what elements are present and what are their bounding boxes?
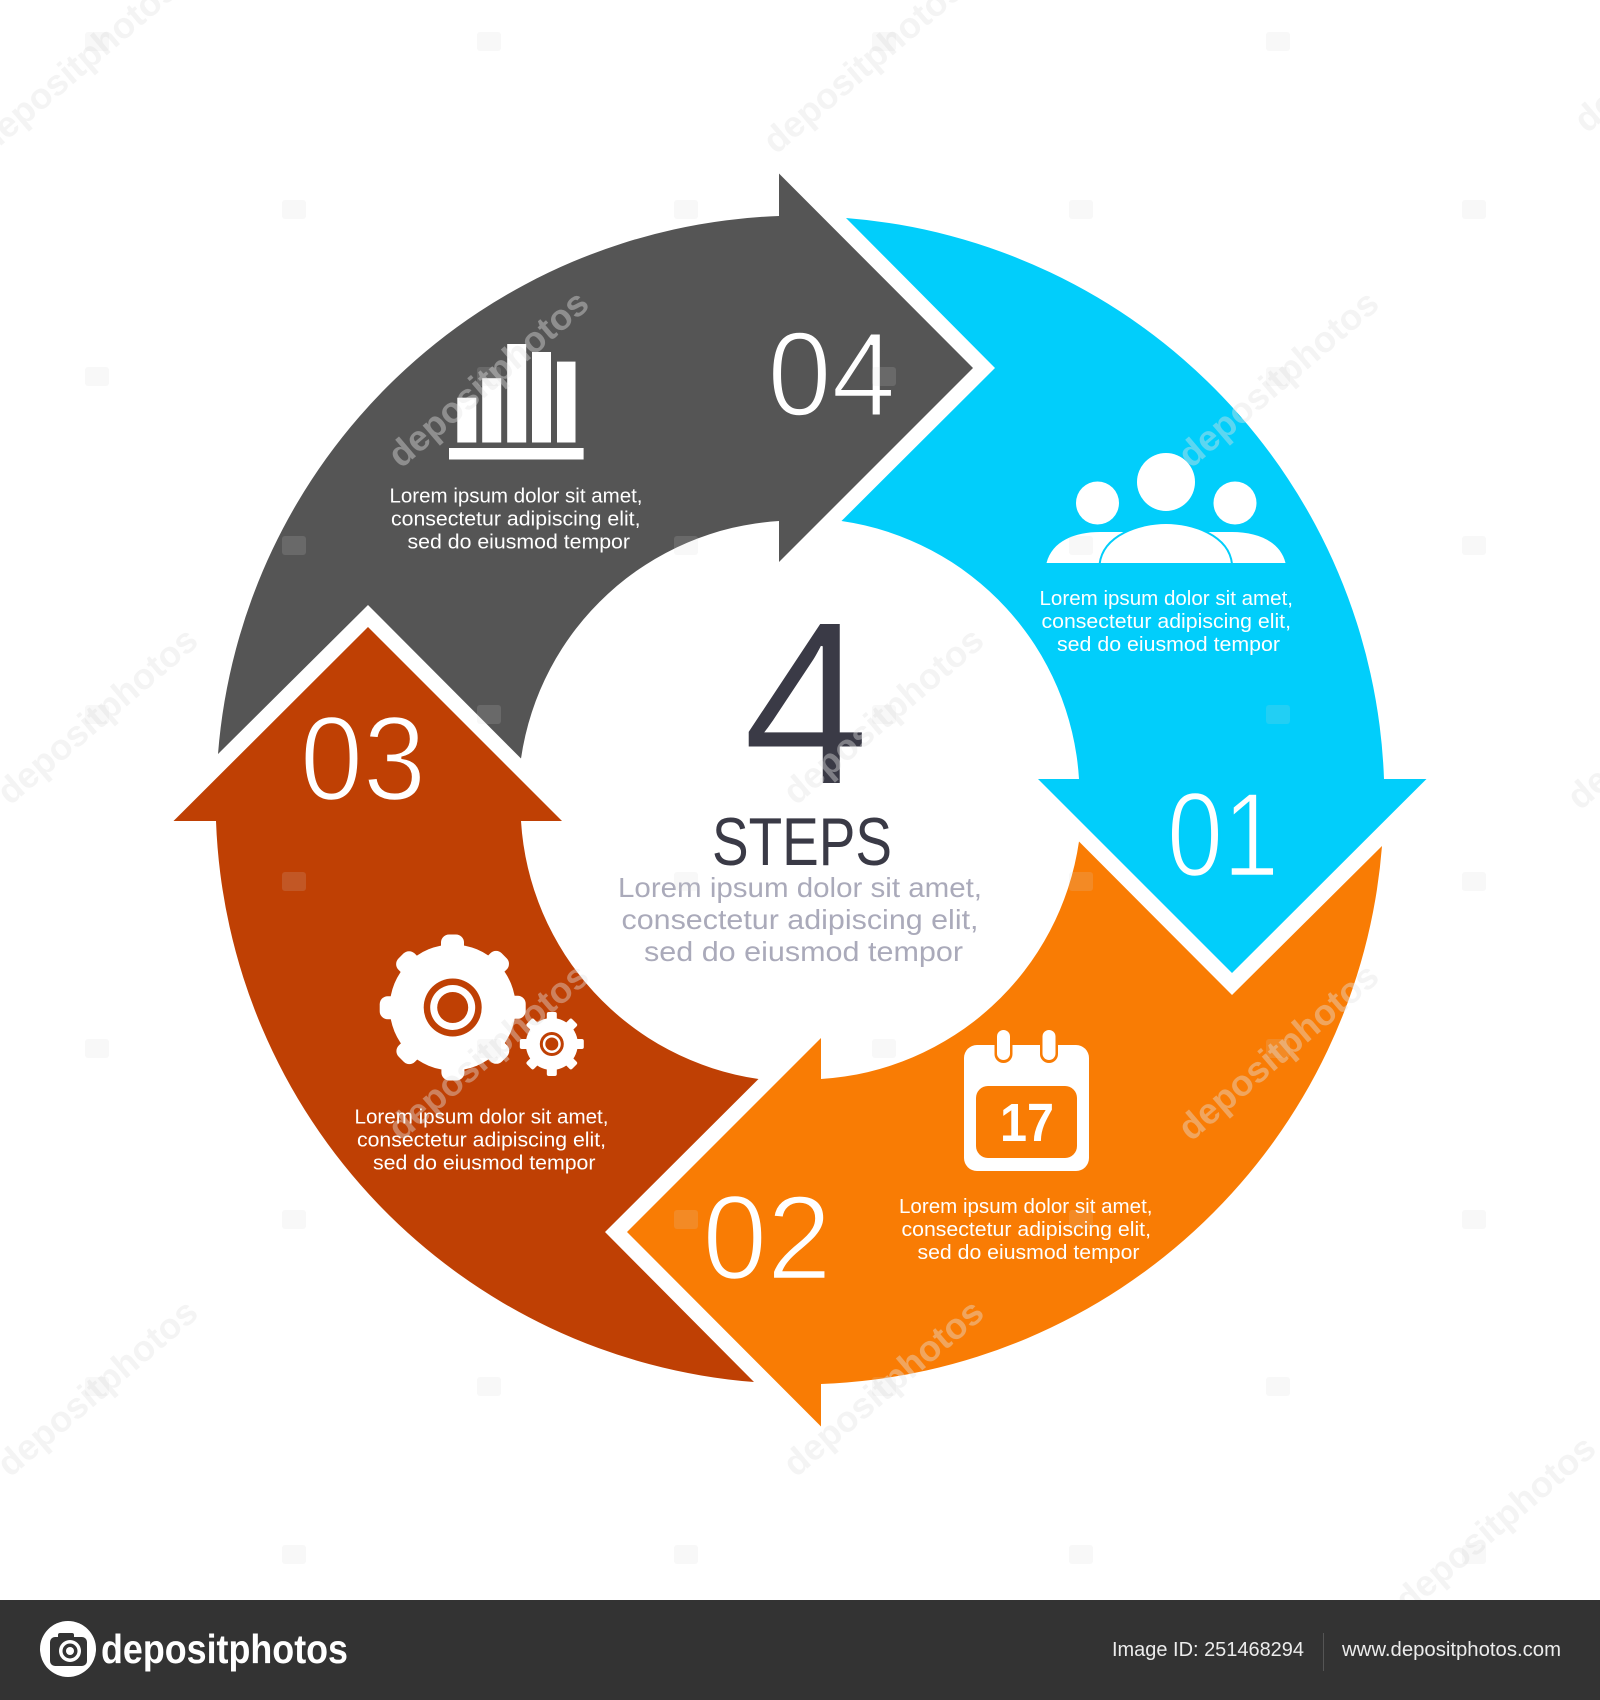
number: 04: 04 [768,308,896,442]
arrow: rust segment [174,627,758,1382]
watermark: depositphotos overlay: depositphotos [775,619,991,812]
panel: step 04 [218,174,973,758]
icon: calendar: 17 [1000,1093,1054,1153]
big numeral 4: 4 [742,572,870,834]
panel: step 02 [627,842,1382,1426]
text: center description: Lorem ipsum dolor sit amet, [618,872,982,903]
heading: STEPS: STEPS [712,804,892,880]
text: step 03 description: Lorem ipsum dolor sit amet, [354,1106,608,1128]
watermark: depositphotos overlay: depositphotos [1170,955,1386,1148]
arrow: gray segment [218,174,973,758]
number: 02: 02 [702,1171,832,1305]
text: step 03 description: consectetur adipiscing elit, [357,1130,606,1152]
text: step 04 description: Lorem ipsum dolor sit amet, [390,486,642,508]
footer bar [0,1600,1600,1700]
watermark: depositphotos overlay: depositphotos [1170,282,1386,475]
panel: step 03 [174,627,758,1382]
image id: Image ID: 251468294 [1112,1639,1304,1661]
number: 03: 03 [300,692,426,826]
text: step 02 description: Lorem ipsum dolor sit amet, [899,1196,1152,1218]
watermark: depositphotos overlay: depositphotos [1387,1427,1600,1620]
watermark: depositphotos overlay: depositphotos [380,282,596,475]
text: step 01 description: Lorem ipsum dolor sit amet, [1040,588,1293,610]
text: step 04 description [390,486,642,554]
icon: gears [380,934,584,1080]
arrow: orange segment [627,842,1382,1426]
watermark: depositphotos overlay: depositphotos [775,1291,991,1484]
text: step 01 description [1040,588,1293,656]
text: step 04 description: consectetur adipiscing elit, [391,508,640,530]
text: step 03 description [354,1106,608,1174]
text: step 02 description: sed do eiusmod tempor [918,1242,1140,1264]
icon: people [1046,453,1286,564]
icon: bar chart [449,344,584,460]
website url: www.depositphotos.com [1341,1639,1561,1661]
icon: camera logo [40,1621,96,1677]
text: step 01 description: consectetur adipiscing elit, [1042,611,1291,633]
text: step 02 description [899,1196,1152,1264]
text: step 04 description: sed do eiusmod tempor [408,532,630,554]
text: step 01 description: sed do eiusmod tempor [1057,634,1280,656]
text: center description: sed do eiusmod tempor [644,936,963,967]
text: step 02 description: consectetur adipiscing elit, [902,1219,1151,1241]
watermark: depositphotos overlay: depositphotos [380,955,596,1148]
logo wordmark: depositphotos [101,1626,348,1672]
panel: step 01 [842,218,1426,973]
text: center description [618,872,982,967]
arrow: blue segment [842,218,1426,973]
number: 01: 01 [1167,768,1279,902]
text: center description: consectetur adipiscing elit, [622,904,978,935]
icon: calendar [964,1030,1089,1171]
center: 4 steps title block [618,572,982,967]
text: step 03 description: sed do eiusmod tempor [373,1152,596,1174]
